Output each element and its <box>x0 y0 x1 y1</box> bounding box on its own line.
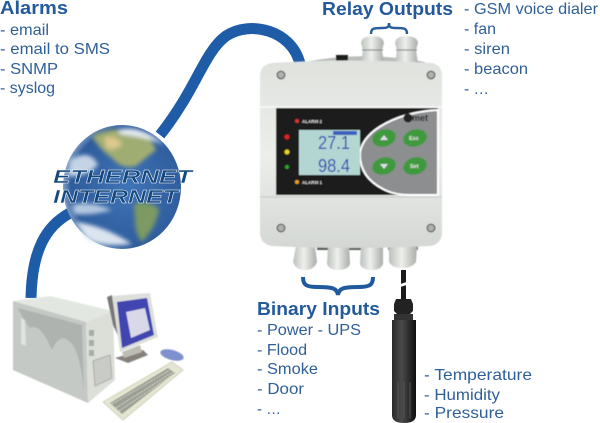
blue cable: globe to computer <box>31 213 70 298</box>
logo: met <box>412 113 428 123</box>
relay output list: - beacon <box>464 61 528 78</box>
keypad buttons: Esc <box>409 136 419 142</box>
LCD <box>299 130 360 176</box>
sensor measurements list <box>424 367 532 422</box>
LCD: 27.1 <box>318 133 350 153</box>
sensor measurements list: - Pressure <box>424 405 504 422</box>
display panel <box>276 108 438 195</box>
label: Ethernet / Internet: INTERNET <box>53 187 181 207</box>
alarm list: - SNMP <box>0 61 58 78</box>
brace: binary inputs <box>303 277 373 295</box>
label: Ethernet / Internet: ETHERNET <box>53 167 195 187</box>
sensor measurements list: - Temperature <box>424 367 532 384</box>
keypad panel <box>360 110 438 195</box>
keypad buttons <box>370 127 429 177</box>
alarm list: - syslog <box>0 80 55 97</box>
relay output list: - GSM voice dialer <box>464 1 599 18</box>
binary input list: - Flood <box>257 342 307 359</box>
alarm labels <box>302 119 322 185</box>
relay output list: - siren <box>464 41 510 58</box>
alarm labels: ALARM 1 <box>302 180 322 185</box>
heading: Binary Inputs: Binary Inputs <box>257 299 380 319</box>
brace: relay outputs <box>371 23 407 34</box>
blue cable: globe to device <box>160 29 300 135</box>
LEDs <box>284 119 299 184</box>
binary input list: - Smoke <box>257 361 318 378</box>
keyboard <box>103 362 183 420</box>
relay output list: - fan <box>464 21 496 38</box>
globe <box>63 125 181 249</box>
top cable glands <box>361 36 418 64</box>
mouse <box>159 347 185 363</box>
enclosure body <box>260 60 442 248</box>
probe sensor <box>392 270 416 423</box>
logo <box>404 113 428 123</box>
relay output list <box>464 1 599 98</box>
device: transmitter <box>260 36 442 270</box>
alarm list: - email <box>0 22 49 39</box>
sensor measurements list: - Humidity <box>424 387 500 404</box>
keypad buttons: Set <box>410 164 419 170</box>
relay output list: - … <box>464 81 489 98</box>
alarm labels: ALARM 2 <box>302 119 322 124</box>
label: Ethernet / Internet <box>53 167 195 207</box>
tower <box>13 296 115 403</box>
bottom cable glands <box>293 240 418 270</box>
binary input list: - Power - UPS <box>257 322 361 339</box>
binary input list <box>257 322 361 418</box>
computer illustration <box>13 293 185 420</box>
top strip and black plug <box>300 55 425 66</box>
alarm list <box>0 22 110 97</box>
binary input list: - … <box>257 401 281 418</box>
screws <box>277 71 435 232</box>
binary input list: - Door <box>257 381 305 398</box>
monitor <box>107 293 158 363</box>
LCD: 98.4 <box>318 156 350 176</box>
alarm list: - email to SMS <box>0 41 110 58</box>
